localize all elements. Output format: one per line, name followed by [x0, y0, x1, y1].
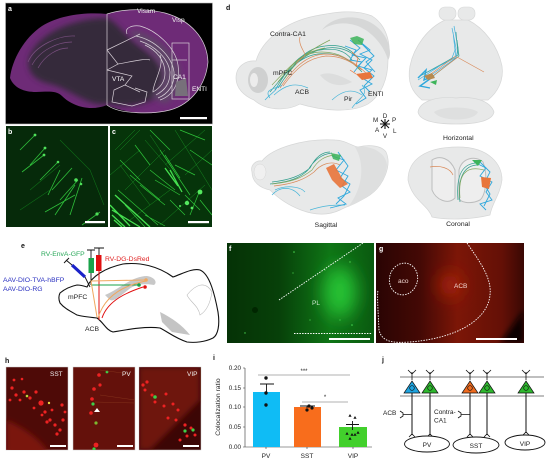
atlas outline overlay [107, 10, 208, 113]
panel e: injection schematic: AAV-DIO-TVA-hBFP [3, 277, 65, 284]
orientation compass: M [373, 117, 378, 124]
error bars [260, 384, 359, 430]
panel g: red ACB image: aco [398, 278, 409, 285]
panel j: circuit diagram [381, 357, 545, 453]
category labels: SST [301, 453, 313, 460]
orientation compass: P [392, 117, 396, 124]
main oblique brain: Pir [344, 96, 353, 103]
orientation compass: A [375, 127, 380, 134]
panel i: bar chart colocalization ratio: 0.10 [229, 404, 241, 411]
panel i: bar chart colocalization ratio: 0.20 [229, 365, 241, 372]
panel e: injection schematic [3, 243, 219, 342]
panel i: bar chart colocalization ratio: 0.00 [229, 444, 241, 451]
scale bar [329, 338, 370, 340]
panel b: sparse green neurites [6, 126, 108, 227]
panel a: purple brain section: CA1 [173, 74, 186, 81]
significance lines [258, 375, 350, 402]
projection arrows [91, 271, 146, 320]
brain outline [59, 264, 219, 342]
input synapses [400, 411, 470, 418]
label: Sagittal [315, 222, 338, 229]
panel a: purple brain section [6, 3, 212, 124]
label: Coronal [446, 221, 470, 228]
orientation compass: D [383, 113, 388, 120]
panel j: circuit diagram: VIP [520, 441, 530, 448]
panel d: 3D brain views [226, 5, 502, 229]
panel c: dense green neurites: c [112, 129, 116, 136]
panel e: injection schematic: RV-DG-DsRed [105, 256, 150, 263]
panel f: green PL image: PL [312, 300, 320, 307]
panel f: green PL image: f [229, 246, 232, 253]
panel b: sparse green neurites: b [8, 129, 12, 136]
panel f: green PL image [227, 243, 374, 343]
category labels [262, 453, 358, 460]
arrowhead [94, 408, 100, 412]
category labels: PV [262, 453, 271, 460]
injection syringes [64, 248, 104, 287]
main oblique brain [236, 12, 390, 110]
scale bar [188, 221, 209, 223]
panel j: circuit diagram: j [381, 357, 384, 364]
cell bodies [404, 381, 534, 393]
panel i: bar chart colocalization ratio: 0.15 [229, 385, 241, 392]
panel i: bar chart colocalization ratio [213, 355, 372, 460]
micrograph VIP: VIP [187, 371, 197, 378]
orientation compass [373, 113, 397, 140]
panel j: circuit diagram: SST [470, 443, 482, 450]
axes [243, 368, 372, 449]
panel c: dense green neurites [110, 126, 212, 227]
panel e: injection schematic: AAV-DIO-RG [3, 286, 43, 293]
panel a: purple brain section: Visam [137, 8, 156, 15]
horizontal brain view [409, 7, 502, 142]
bars [253, 392, 280, 447]
panel h: colocalization micrographs [5, 358, 201, 455]
main oblique brain: Contra-CA1 [270, 31, 306, 38]
panel j: circuit diagram: ACB [383, 410, 396, 417]
main oblique brain: ENTl [368, 91, 384, 98]
main oblique brain: ACB [295, 89, 309, 96]
category labels: VIP [348, 453, 358, 460]
orientation compass: L [393, 128, 397, 135]
main oblique brain: mPFC [273, 70, 292, 77]
labels panel a: a [8, 6, 12, 13]
panel j: circuit diagram: Contra- [434, 409, 456, 416]
scale bar [85, 221, 105, 223]
micrograph PV [73, 367, 135, 451]
target ellipses [404, 435, 545, 453]
panel i: bar chart colocalization ratio: 0.05 [229, 424, 241, 431]
panel d: 3D brain views: d [226, 5, 230, 12]
sagittal brain view [252, 140, 388, 229]
micrograph VIP [139, 367, 201, 450]
panel e: injection schematic: ACB [85, 326, 99, 333]
label: Horizontal [443, 135, 474, 142]
coronal brain view [408, 147, 502, 228]
panel a: purple brain section: VTA [112, 76, 125, 83]
micrograph SST [6, 367, 68, 455]
panel j: circuit diagram: PV [423, 442, 432, 449]
panel a: purple brain section: Visp [172, 17, 185, 24]
panel g: red ACB image: g [379, 246, 383, 253]
panel j: circuit diagram: CA1 [434, 418, 447, 424]
panel e: injection schematic: e [21, 243, 25, 250]
neuron tracts [265, 37, 368, 108]
panel i: bar chart colocalization ratio: *** [300, 369, 308, 375]
data points [264, 376, 314, 412]
micrograph PV: PV [122, 371, 131, 378]
micrograph SST: SST [50, 371, 63, 378]
panel i: bar chart colocalization ratio: Colocalization ratio [215, 378, 222, 436]
grey brain regions [105, 276, 156, 300]
panel i: bar chart colocalization ratio: i [213, 355, 215, 362]
panel i: bar chart colocalization ratio: * [324, 395, 327, 401]
scale bar [476, 338, 517, 340]
panel e: injection schematic: mPFC [68, 294, 87, 301]
scale bar [180, 117, 207, 119]
orientation compass: V [383, 133, 388, 140]
panel e: injection schematic: RV-EnvA-GFP [41, 251, 85, 258]
panel g: red ACB image [376, 243, 524, 343]
panel a: purple brain section: ENTl [192, 86, 207, 93]
panel h: colocalization micrographs: h [5, 358, 9, 365]
neurons [408, 370, 530, 437]
panel g: red ACB image: ACB [454, 283, 467, 290]
brain section tissue [10, 10, 208, 114]
